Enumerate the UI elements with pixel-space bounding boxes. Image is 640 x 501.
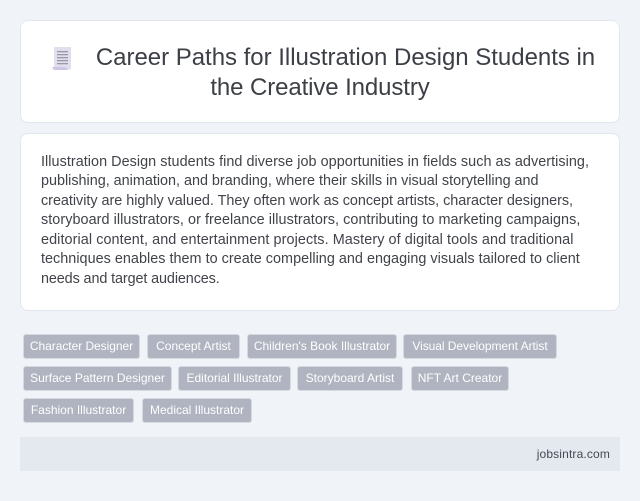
footer bar [20, 437, 620, 471]
tag: Character Designer [30, 339, 133, 353]
tag [142, 398, 252, 423]
tag: Medical Illustrator [150, 403, 244, 417]
tag: Visual Development Artist [412, 339, 548, 353]
tag: Storyboard Artist [306, 371, 394, 385]
description text: publishing, animation, and branding, where their skills in visual storytelling and [41, 173, 539, 189]
tag: Surface Pattern Designer [30, 371, 165, 385]
header panel [20, 20, 620, 123]
tag [23, 366, 172, 391]
description text [41, 154, 589, 287]
description text: needs and target audiences. [41, 271, 220, 287]
tag: NFT Art Creator [418, 371, 502, 385]
description text: creativity are highly valued. They often work as concept artists, character designers, [41, 193, 573, 209]
description text: techniques enables them to create compelling and engaging visuals tailored to client [41, 251, 580, 267]
description text: editorial content, and entertainment projects. Mastery of digital tools and traditional [41, 232, 574, 248]
description panel [20, 133, 620, 311]
description text: storyboard illustrators, or freelance illustrators, contributing to marketing campaigns, [41, 212, 580, 228]
tag: Children's Book Illustrator [254, 339, 390, 353]
tag [23, 334, 140, 359]
description text: Illustration Design students find diverse job opportunities in fields such as advertising, [41, 154, 589, 170]
tag [411, 366, 509, 391]
title: Career Paths for Illustration Design Students in [96, 44, 595, 71]
tag: Editorial Illustrator [186, 371, 283, 385]
title [96, 44, 595, 101]
tag [147, 334, 240, 359]
tag [247, 334, 397, 359]
tag: Concept Artist [156, 339, 231, 353]
tag [178, 366, 291, 391]
icon: paper scroll [52, 47, 71, 70]
tag: Fashion Illustrator [31, 403, 126, 417]
tag [403, 334, 557, 359]
tag list [23, 334, 557, 423]
tag [23, 398, 134, 423]
title: the Creative Industry [210, 74, 430, 101]
tag [297, 366, 403, 391]
footer source text: jobsintra.com [537, 447, 610, 461]
